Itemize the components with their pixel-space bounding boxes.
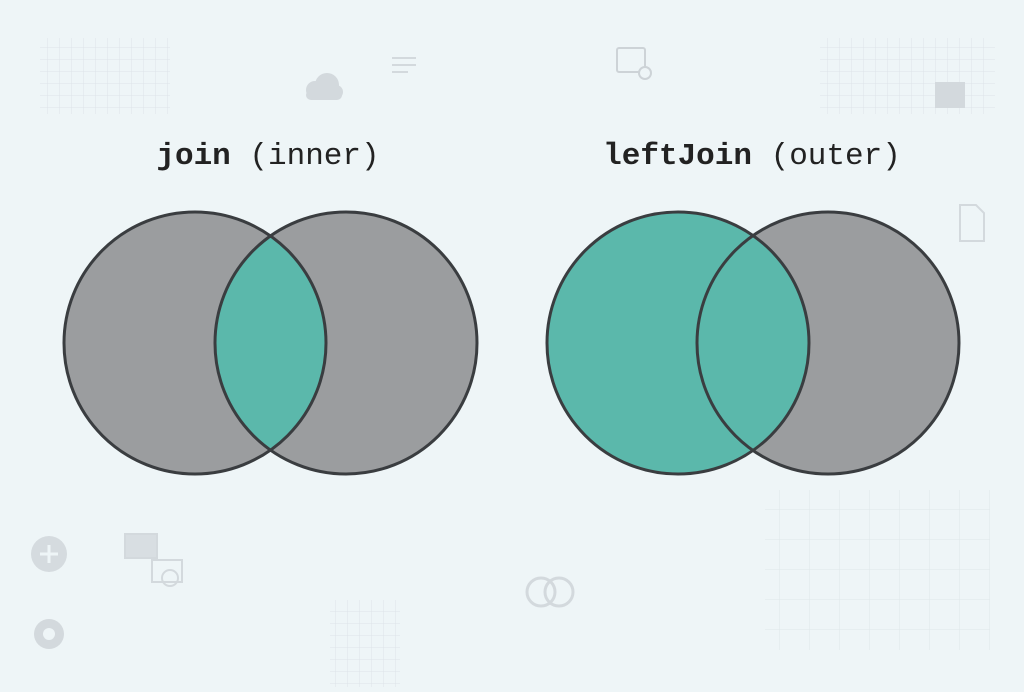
title: leftJoin (outer): leftJoin (outer) xyxy=(603,139,901,174)
icon: file xyxy=(960,205,984,241)
icon: cloud xyxy=(306,73,343,100)
icon: plus circle xyxy=(31,536,67,572)
icon: gear xyxy=(34,619,64,649)
venn: left join xyxy=(547,212,959,474)
icon: table search xyxy=(125,534,182,586)
icon: small venn xyxy=(527,578,573,606)
title: join (inner): join (inner) xyxy=(156,139,380,174)
icon: doc xyxy=(935,82,965,108)
icon: lines xyxy=(392,58,416,72)
icon: code window xyxy=(617,48,651,79)
venn: inner join xyxy=(64,212,477,474)
